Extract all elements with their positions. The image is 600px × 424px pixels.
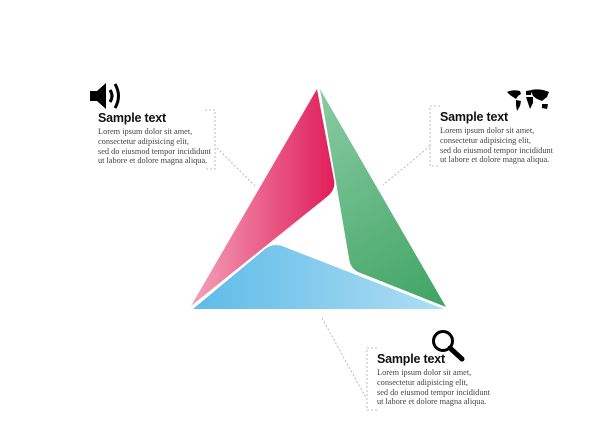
text block: right: Sample text — [440, 110, 508, 124]
shape: green — [320, 89, 446, 307]
text block: left: consectetur adipisicing elit, — [98, 137, 189, 146]
text block: bottom: Sample text — [377, 352, 445, 366]
connector lines — [205, 106, 440, 410]
icon: world map — [507, 89, 549, 111]
text block: bottom: ut labore et dolore magna aliqua. — [377, 397, 486, 406]
shape: blue — [193, 245, 444, 309]
text block: bottom: Lorem ipsum dolor sit amet, — [377, 368, 471, 377]
text block: bottom: consectetur adipisicing elit, — [377, 378, 468, 387]
icon: speaker — [90, 83, 120, 109]
text block: right: sed do eiusmod tempor incididunt — [440, 146, 553, 155]
text block: left: sed do eiusmod tempor incididunt — [98, 147, 211, 156]
text block: left — [98, 111, 211, 165]
text block: left: Lorem ipsum dolor sit amet, — [98, 127, 192, 136]
text block: right: consectetur adipisicing elit, — [440, 136, 531, 145]
text block: left: Sample text — [98, 111, 166, 125]
text block: bottom: sed do eiusmod tempor incididunt — [377, 388, 490, 397]
text block: bottom — [377, 352, 490, 406]
text block: right — [440, 110, 553, 164]
text block: right: Lorem ipsum dolor sit amet, — [440, 126, 534, 135]
text block: left: ut labore et dolore magna aliqua. — [98, 156, 207, 165]
icon: magnifier — [432, 330, 464, 362]
shape: pink — [191, 89, 334, 306]
text block: right: ut labore et dolore magna aliqua. — [440, 155, 549, 164]
